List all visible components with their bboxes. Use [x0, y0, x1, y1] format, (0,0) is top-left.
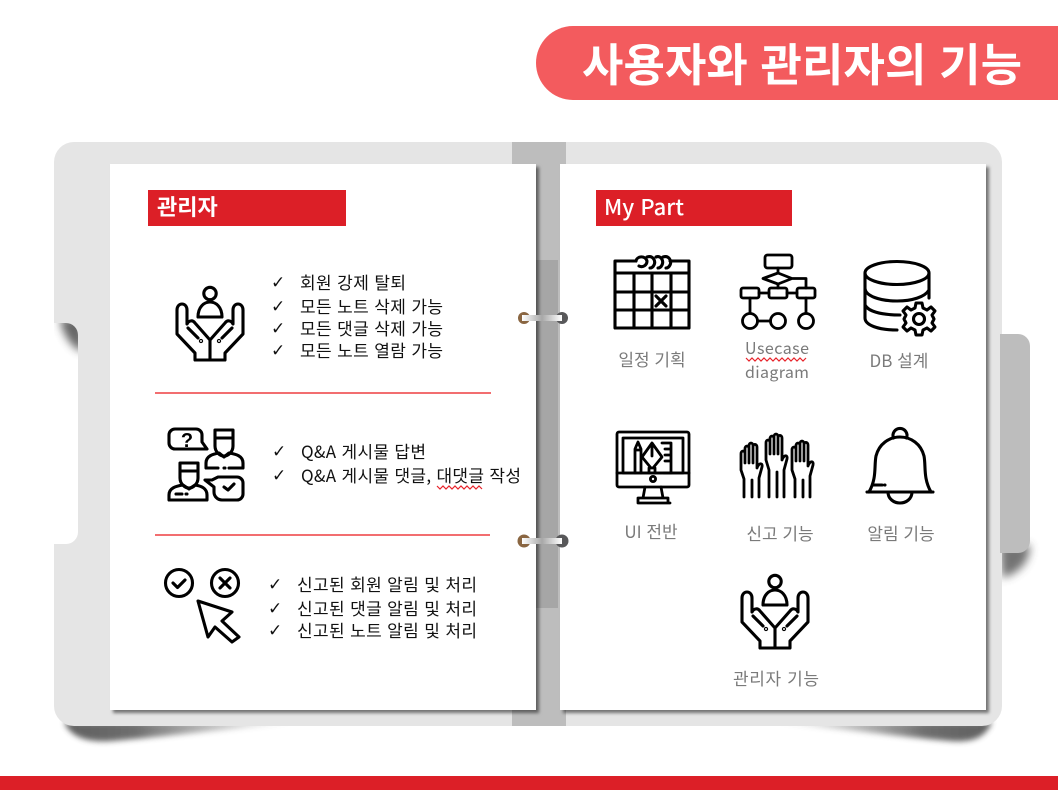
list: Q and A: ✓	[272, 442, 286, 462]
list: report handling: 신고된 댓글 알림 및 처리	[297, 595, 477, 620]
footer bar	[0, 776, 1058, 790]
icon: hands holding person	[177, 287, 243, 360]
list: member controls	[271, 269, 443, 362]
list: report handling: 신고된 회원 알림 및 처리	[297, 571, 477, 596]
label: usecase diagram: diagram	[745, 359, 809, 383]
title banner: 사용자와 관리자의 기능	[582, 29, 1022, 94]
icon: hands holding person small	[742, 575, 808, 648]
icon: question and answer people	[169, 429, 243, 500]
heading: My Part: My Part	[604, 190, 684, 222]
label: report feature: 신고 기능	[746, 520, 814, 545]
icon: approve reject and cursor	[166, 570, 239, 642]
list: report handling: 신고된 노트 알림 및 처리	[297, 617, 477, 642]
list: report handling	[268, 571, 477, 642]
list: member controls: ✓	[271, 319, 285, 339]
binder ring bottom	[518, 534, 568, 548]
list: Q and A: Q&A 게시물 댓글, 대댓글 작성	[301, 462, 521, 487]
right binder tab shadow	[1000, 545, 1030, 578]
label: usecase diagram	[745, 335, 809, 383]
binder ring top	[518, 312, 568, 324]
spine	[512, 142, 566, 726]
list: member controls: ✓	[271, 297, 285, 317]
heading: 관리자: 관리자	[157, 190, 218, 222]
label: usecase diagram: Usecase	[745, 335, 809, 359]
list: report handling: ✓	[268, 621, 282, 641]
label: whole UI: UI 전반	[624, 518, 678, 543]
list: member controls: 모든 노트 열람 가능	[300, 337, 443, 362]
label: admin feature: 관리자 기능	[733, 665, 819, 690]
panel: left page	[110, 164, 536, 710]
book cover shadows	[64, 722, 992, 741]
list: report handling: ✓	[268, 599, 282, 619]
icon: database with gear	[865, 262, 935, 335]
icon: calendar	[615, 257, 689, 328]
label: database design: DB 설계	[870, 347, 928, 372]
book cover with notch	[54, 142, 1002, 726]
list: member controls: ✓	[271, 341, 285, 361]
list: member controls: 회원 강제 탈퇴	[300, 269, 406, 294]
icon: flowchart	[741, 255, 815, 328]
panel: right page	[560, 164, 986, 710]
right binder tab	[1000, 334, 1030, 553]
label: schedule: 일정 기획	[618, 346, 686, 371]
list: Q and A: ✓	[272, 466, 286, 486]
icon: question and answer people: ?	[181, 430, 193, 452]
list: Q and A: Q&A 게시물 답변	[301, 438, 426, 463]
list: member controls: ✓	[271, 273, 285, 293]
icon: raised hands	[741, 434, 813, 497]
icon: monitor with design tools	[617, 432, 689, 503]
label: notification feature: 알림 기능	[867, 520, 935, 545]
list: member controls: 모든 노트 삭제 가능	[300, 293, 443, 318]
heading: 관리자	[148, 190, 346, 226]
notch shadow	[60, 318, 84, 352]
list: member controls: 모든 댓글 삭제 가능	[300, 315, 443, 340]
icon: bell	[867, 428, 933, 503]
list: report handling: ✓	[268, 575, 282, 595]
list: Q and A	[272, 438, 521, 489]
heading: My Part	[596, 190, 792, 226]
